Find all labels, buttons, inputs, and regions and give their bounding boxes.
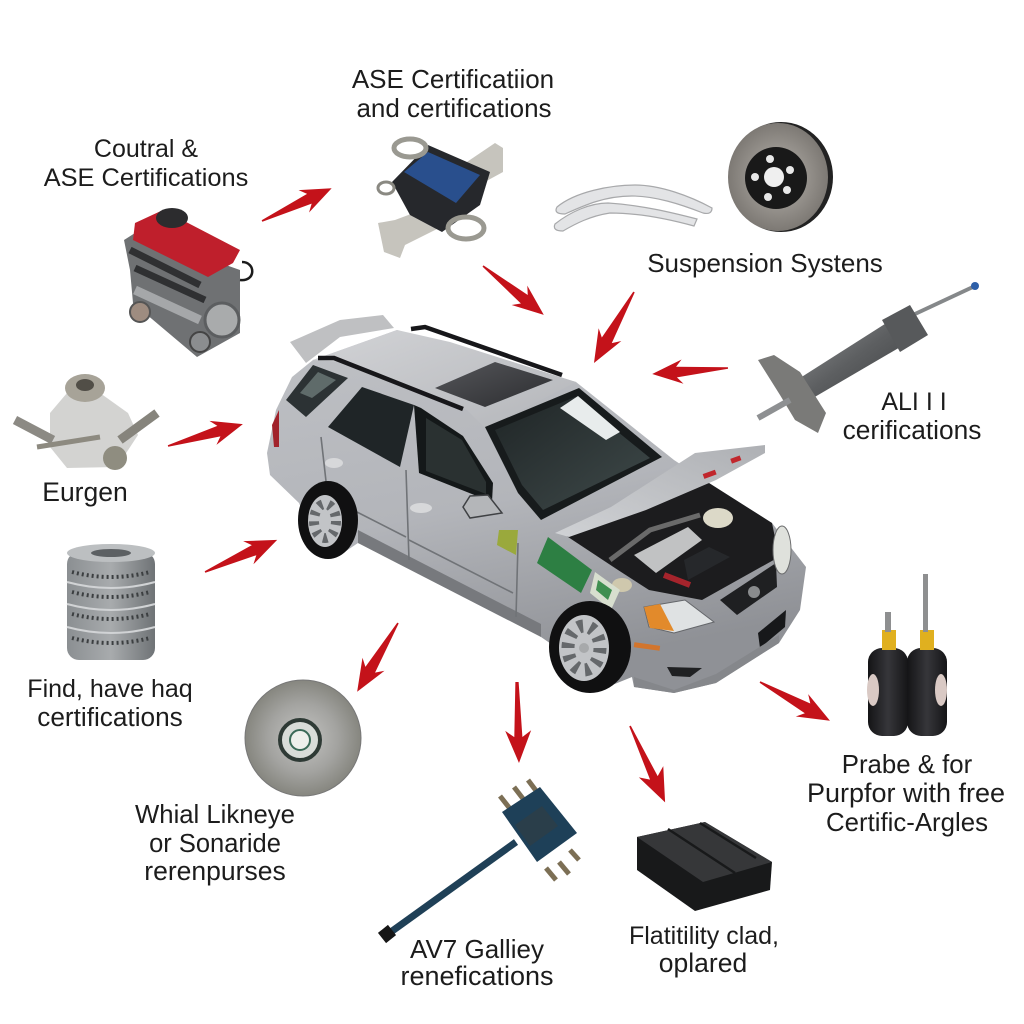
label: lower-right bottles: Prabe & for (842, 751, 973, 779)
tail light (272, 410, 279, 447)
label: left pump: Eurgen (42, 477, 128, 507)
icon: connector tool (382, 780, 579, 938)
green stickers (537, 537, 592, 593)
arrow 7 (346, 616, 409, 698)
icon: black control box (637, 822, 772, 911)
arrow 6 (200, 528, 282, 584)
heading: top left label (44, 135, 248, 192)
arrow 5 (164, 412, 246, 458)
icon: rotor disc lower left (245, 680, 361, 796)
rear wheel (298, 481, 358, 559)
rear door window (328, 387, 414, 467)
label: suspension systems: Suspension Systens (647, 248, 883, 278)
icon: curved suspension arms (554, 185, 712, 231)
label: bottom box: Flatitility clad, (629, 922, 779, 950)
arrow 4 (651, 356, 729, 386)
side mirror (463, 495, 502, 518)
label: left brake stack: Find, have haq (27, 675, 193, 703)
heading: top centre label: ASE Certificatiion (352, 64, 554, 94)
heading: top centre label (352, 64, 554, 123)
label: lower-right bottles: Purpfor with free (807, 778, 1005, 808)
car (267, 315, 806, 693)
label: left brake stack: certifications (37, 702, 183, 732)
label: lower-left disc: or Sonaride (149, 830, 281, 858)
icon: water pump (15, 374, 157, 470)
heading: top centre label: and certifications (356, 93, 552, 123)
label: bottom tool: AV7 Galliey (410, 934, 544, 964)
arrow 8 (504, 682, 532, 763)
label: right shock (843, 388, 981, 445)
arrow 9 (618, 720, 677, 808)
label: lower-left disc: rerenpurses (144, 856, 286, 886)
door seams and handles (321, 437, 518, 617)
front door window (414, 405, 493, 502)
icon: brake disc top right (728, 122, 833, 232)
label: right shock: cerifications (843, 415, 981, 445)
sunroof (435, 362, 553, 407)
front grille (720, 563, 777, 615)
roof panel (313, 330, 576, 428)
label: bottom box: oplared (659, 948, 747, 978)
arrow 3 (583, 286, 645, 369)
icon: oil bottles (867, 574, 947, 736)
car body (267, 330, 806, 693)
label: lower-right bottles (807, 751, 1005, 837)
quarter window (286, 365, 348, 417)
icon: red engine (124, 208, 252, 357)
headlights (644, 600, 714, 633)
icon: shock absorber (758, 282, 979, 433)
icon: stacked gears (67, 544, 155, 660)
arrow 2 (475, 256, 552, 325)
heading: top left label: ASE Certifications (44, 164, 248, 192)
arrows: red pointers around the car (164, 177, 836, 808)
label: bottom box (629, 922, 779, 978)
arrow 1 (257, 177, 337, 232)
heading: top left label: Coutral & (94, 135, 198, 163)
arrow 10 (754, 671, 836, 732)
lower rocker shadow (358, 530, 541, 637)
engine block (634, 527, 702, 573)
label: lower-left disc: Whial Likneye (135, 801, 295, 829)
front wheel (549, 601, 631, 693)
label: lower-right bottles: Certific-Argles (826, 809, 988, 837)
engine bay (562, 483, 779, 600)
front bumper details (667, 667, 702, 677)
windshield (485, 388, 662, 520)
label: bottom tool: renefications (400, 961, 554, 991)
label: bottom tool (400, 934, 554, 991)
label: left brake stack (27, 675, 193, 732)
icon: sensor module (378, 139, 503, 258)
raised hood (555, 445, 765, 537)
roof rails (318, 327, 562, 409)
label: right shock: ALI I I (881, 388, 947, 416)
raised tailgate (290, 315, 394, 363)
label: lower-left disc (135, 801, 295, 886)
